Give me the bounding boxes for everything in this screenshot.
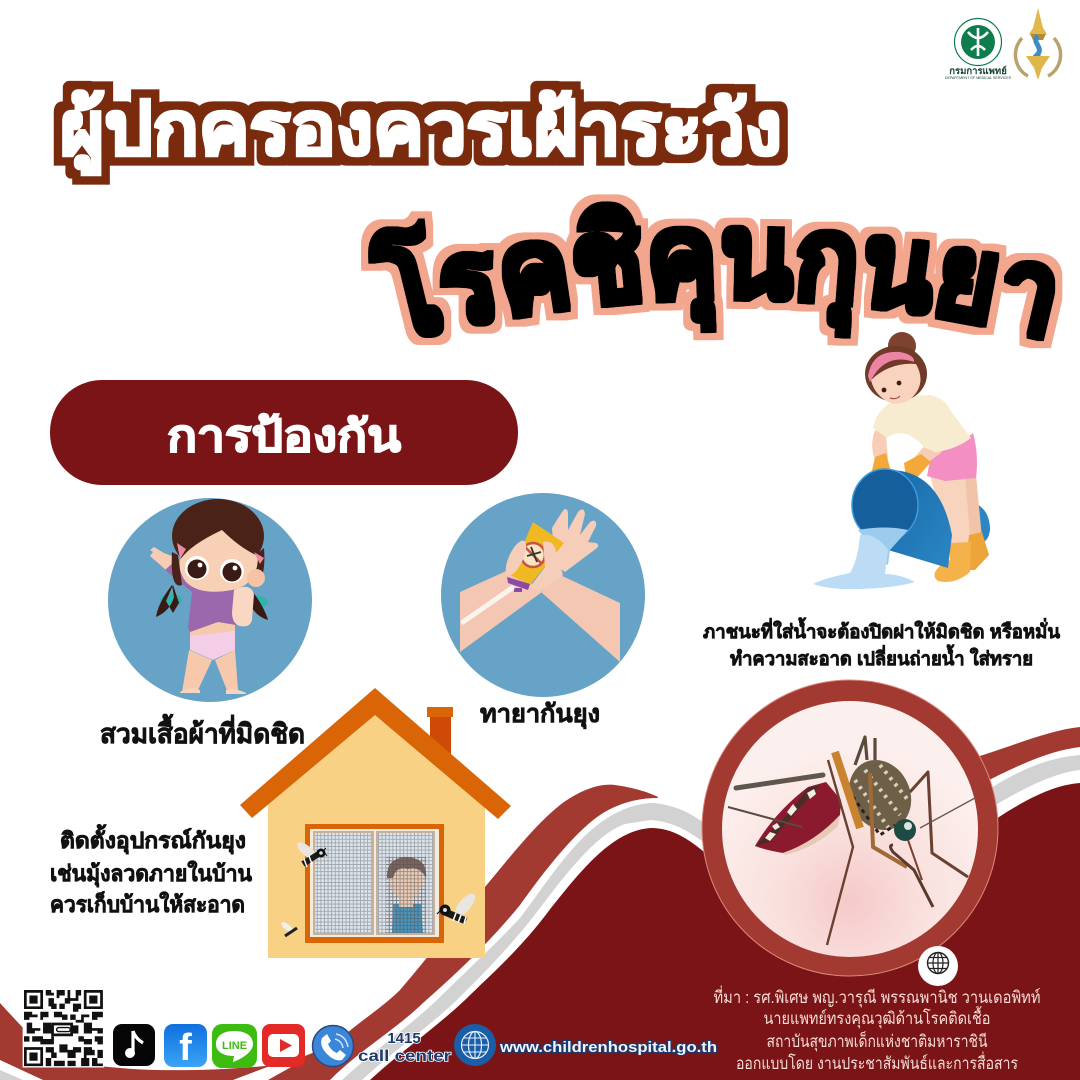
- window: [305, 824, 444, 943]
- logo: department of medical services: DEPARTMENT OF MEDICAL SERVICES: [945, 76, 1012, 80]
- text: website address: www.childrenhospital.go.th: [499, 1039, 717, 1056]
- gripping hand: [502, 538, 530, 578]
- heading pill: prevention: การป้องกัน: [167, 412, 401, 461]
- label: install mosquito protection: ติดตั้งอุปกรณ์กันยุง: [60, 824, 246, 855]
- icon: line: LINE: [222, 1040, 247, 1052]
- icon: phone: [312, 1026, 354, 1066]
- title: parents should watch out: ผู้ปกครองควรเฝ้าระวัง: [60, 87, 782, 175]
- house wall: [268, 712, 485, 958]
- water: [813, 535, 915, 589]
- chimney: [427, 707, 453, 760]
- icon: line: [212, 1024, 257, 1068]
- photo: mosquito biting skin: [702, 680, 998, 976]
- bucket: [885, 470, 952, 568]
- boots: [965, 532, 989, 570]
- source credits: ออกแบบโดย งานประชาสัมพันธ์และการสื่อสาร: [736, 1051, 1018, 1073]
- label: install mosquito protection: [50, 824, 252, 917]
- mosquito abdomen: [755, 782, 841, 853]
- logo: department of medical services: กรมการแพทย์: [949, 65, 1007, 77]
- icon: tiktok: [113, 1024, 155, 1066]
- child legs: [182, 650, 238, 693]
- mosquito thorax: [838, 750, 922, 840]
- tube: [510, 522, 564, 585]
- arms: [872, 430, 942, 470]
- source credits: นายแพทย์ทรงคุณวุฒิด้านโรคติดเชื้อ: [764, 1006, 990, 1029]
- open hand: [552, 509, 598, 572]
- label: cover water containers: ภาชนะที่ใส่น้ำจะต้องปิดฝาให้มิดชิด หรือหมั่น: [703, 617, 1060, 643]
- icon: facebook: [164, 1024, 207, 1069]
- label: cover water containers: [703, 617, 1060, 670]
- label: install mosquito protection: ควรเก็บบ้านให้สะอาด: [50, 890, 245, 917]
- label: install mosquito protection: เช่นมุ้งลวดภายในบ้าน: [50, 860, 252, 888]
- title: chikungunya: โรคชิคุนกุนยา: [361, 194, 1062, 348]
- icon: youtube: [262, 1024, 305, 1067]
- gloves: [871, 453, 890, 480]
- text: call center: [358, 1030, 451, 1065]
- arms: [460, 568, 542, 652]
- source credits: สถาบันสุขภาพเด็กแห่งชาติมหาราชินี: [766, 1030, 988, 1052]
- label: wear covering clothes: สวมเสื้อผ้าที่มิดชิด: [100, 713, 305, 749]
- illustration: girl pouring water from bucket: [813, 332, 990, 589]
- legs: [930, 475, 972, 550]
- mosquito on window left: [295, 839, 327, 867]
- shirt: [873, 395, 971, 452]
- text: call center: 1415: [387, 1030, 421, 1047]
- icon: child covering up with clothes: [108, 498, 312, 702]
- label: cover water containers: ทำความสะอาด เปลี่ยนถ่ายน้ำ ใส่ทราย: [730, 644, 1033, 670]
- small mosquito: [280, 920, 297, 936]
- icon: globe badge: [918, 946, 958, 986]
- mosquito wing: [736, 775, 823, 788]
- shorts: [927, 433, 977, 481]
- roof: [240, 688, 511, 819]
- mosquito head: [894, 819, 916, 841]
- label: apply repellent: ทายากันยุง: [480, 700, 600, 730]
- source credits: [714, 985, 1040, 1073]
- logo: children's hospital emblem: [1015, 8, 1061, 80]
- icon: facebook: f: [179, 1027, 192, 1069]
- illustration: house with mosquito screens: [240, 688, 511, 958]
- logo: department of medical services: [945, 18, 1012, 80]
- icon: website globe: [454, 1024, 496, 1066]
- mosquito on window right: [437, 890, 479, 924]
- head: [888, 332, 916, 360]
- icon: applying mosquito repellent: [441, 493, 645, 697]
- text: call center: call center: [358, 1048, 451, 1065]
- background waves: [0, 727, 1080, 1080]
- bucket back rim: [966, 500, 990, 542]
- QR code: [23, 989, 104, 1068]
- mosquito legs: [728, 737, 975, 945]
- heading pill: prevention: [50, 380, 518, 485]
